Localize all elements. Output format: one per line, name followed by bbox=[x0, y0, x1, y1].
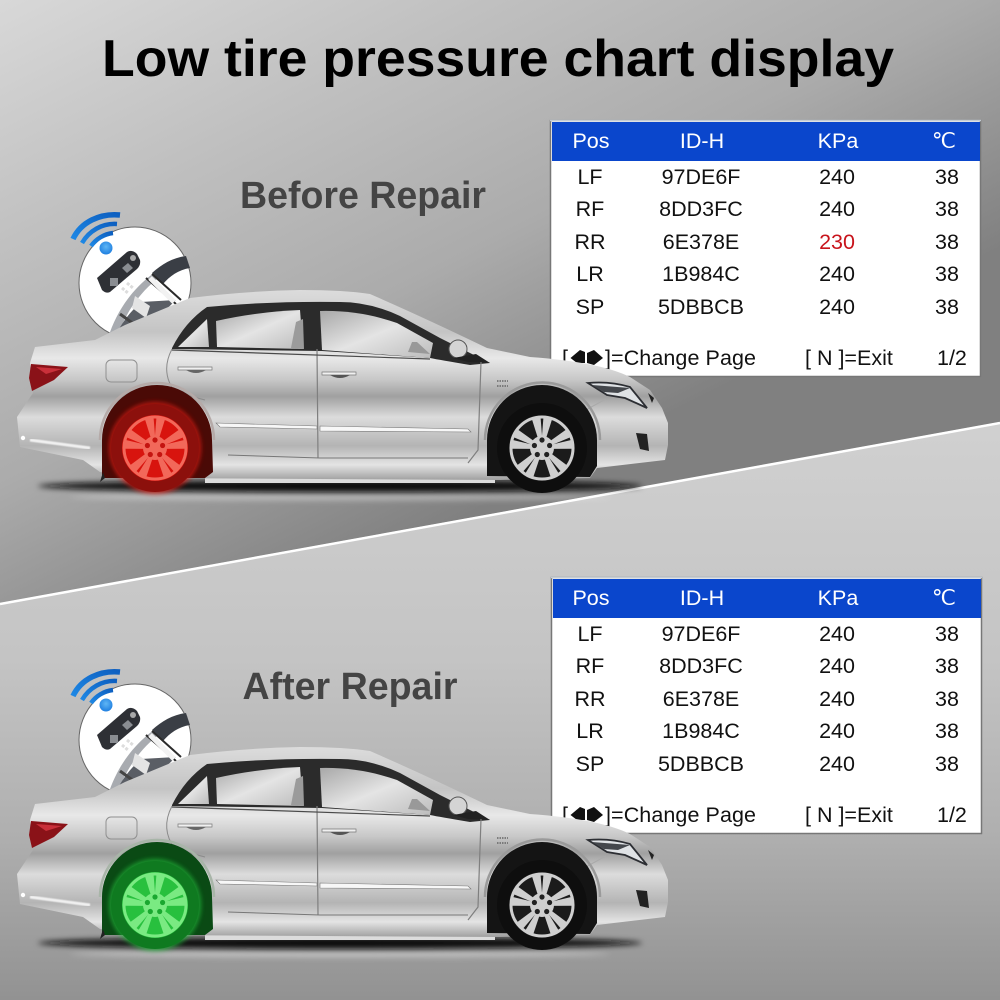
table rows: SP bbox=[576, 295, 604, 319]
table rows: 240 bbox=[819, 654, 855, 678]
table rows: 240 bbox=[819, 752, 855, 776]
table rows: 97DE6F bbox=[662, 622, 740, 646]
table rows: 6E378E bbox=[663, 230, 739, 254]
table rows: 1B984C bbox=[662, 262, 740, 286]
table header: KPa bbox=[818, 586, 858, 610]
table rows: LF bbox=[577, 165, 603, 189]
rear wheel: green bbox=[100, 840, 214, 951]
table rows: 230 bbox=[819, 230, 855, 254]
table rows: 38 bbox=[935, 719, 959, 743]
table rows: RF bbox=[576, 197, 604, 221]
table rows bbox=[574, 165, 959, 319]
table rows: LR bbox=[576, 262, 604, 286]
table rows: 8DD3FC bbox=[659, 197, 743, 221]
table rows: 240 bbox=[819, 262, 855, 286]
table rows: 97DE6F bbox=[662, 165, 740, 189]
car: after repair bbox=[17, 747, 668, 958]
table footer bbox=[562, 803, 967, 827]
table header: ID-H bbox=[680, 129, 724, 153]
table footer: [ N ]=Exit bbox=[805, 346, 893, 370]
table rows: 8DD3FC bbox=[659, 654, 743, 678]
front wheel bbox=[497, 860, 587, 950]
table header: ID-H bbox=[680, 586, 724, 610]
table header: ℃ bbox=[932, 129, 956, 153]
icon: tire sensor with wireless signal bbox=[73, 215, 191, 340]
table footer: [ bbox=[562, 346, 568, 370]
table rows: LF bbox=[577, 622, 603, 646]
table rows: 38 bbox=[935, 230, 959, 254]
table rows: 240 bbox=[819, 719, 855, 743]
rear wheel: red bbox=[100, 383, 214, 494]
car: before repair bbox=[17, 290, 668, 500]
table rows: 38 bbox=[935, 622, 959, 646]
table rows: 240 bbox=[819, 687, 855, 711]
table header: Pos bbox=[572, 586, 610, 610]
table header: Pos bbox=[572, 129, 610, 153]
table header bbox=[552, 122, 980, 161]
table rows: SP bbox=[576, 752, 604, 776]
table rows: 38 bbox=[935, 197, 959, 221]
table footer: ]=Change Page bbox=[605, 346, 756, 370]
table rows: 38 bbox=[935, 295, 959, 319]
table footer: [ N ]=Exit bbox=[805, 803, 893, 827]
table header bbox=[553, 579, 981, 618]
table rows: 240 bbox=[819, 295, 855, 319]
panel: before repair table bbox=[550, 120, 981, 376]
heading: after repair: After Repair bbox=[242, 666, 458, 708]
table rows bbox=[574, 622, 959, 776]
table rows: 1B984C bbox=[662, 719, 740, 743]
table rows: 38 bbox=[935, 654, 959, 678]
table rows: 38 bbox=[935, 752, 959, 776]
table footer: 1/2 bbox=[937, 346, 967, 370]
table rows: 38 bbox=[935, 687, 959, 711]
front wheel bbox=[497, 403, 587, 493]
table rows: 5DBBCB bbox=[658, 752, 744, 776]
table rows: 240 bbox=[819, 622, 855, 646]
table rows: 240 bbox=[819, 197, 855, 221]
table rows: RR bbox=[574, 687, 606, 711]
table rows: RF bbox=[576, 654, 604, 678]
table header: KPa bbox=[818, 129, 858, 153]
table rows: 240 bbox=[819, 165, 855, 189]
table rows: LR bbox=[576, 719, 604, 743]
table rows: 5DBBCB bbox=[658, 295, 744, 319]
table rows: 38 bbox=[935, 165, 959, 189]
icon: tire sensor with wireless signal, after repair bbox=[73, 672, 191, 797]
table footer: ]=Change Page bbox=[605, 803, 756, 827]
heading: before repair: Before Repair bbox=[240, 175, 486, 217]
title: Low tire pressure chart display bbox=[102, 30, 894, 88]
panel: after repair table bbox=[551, 578, 982, 834]
table rows: 6E378E bbox=[663, 687, 739, 711]
table rows: 38 bbox=[935, 262, 959, 286]
table footer bbox=[562, 346, 967, 370]
table footer: [ bbox=[562, 803, 568, 827]
table header: ℃ bbox=[932, 586, 956, 610]
table footer: 1/2 bbox=[937, 803, 967, 827]
table rows: RR bbox=[574, 230, 606, 254]
